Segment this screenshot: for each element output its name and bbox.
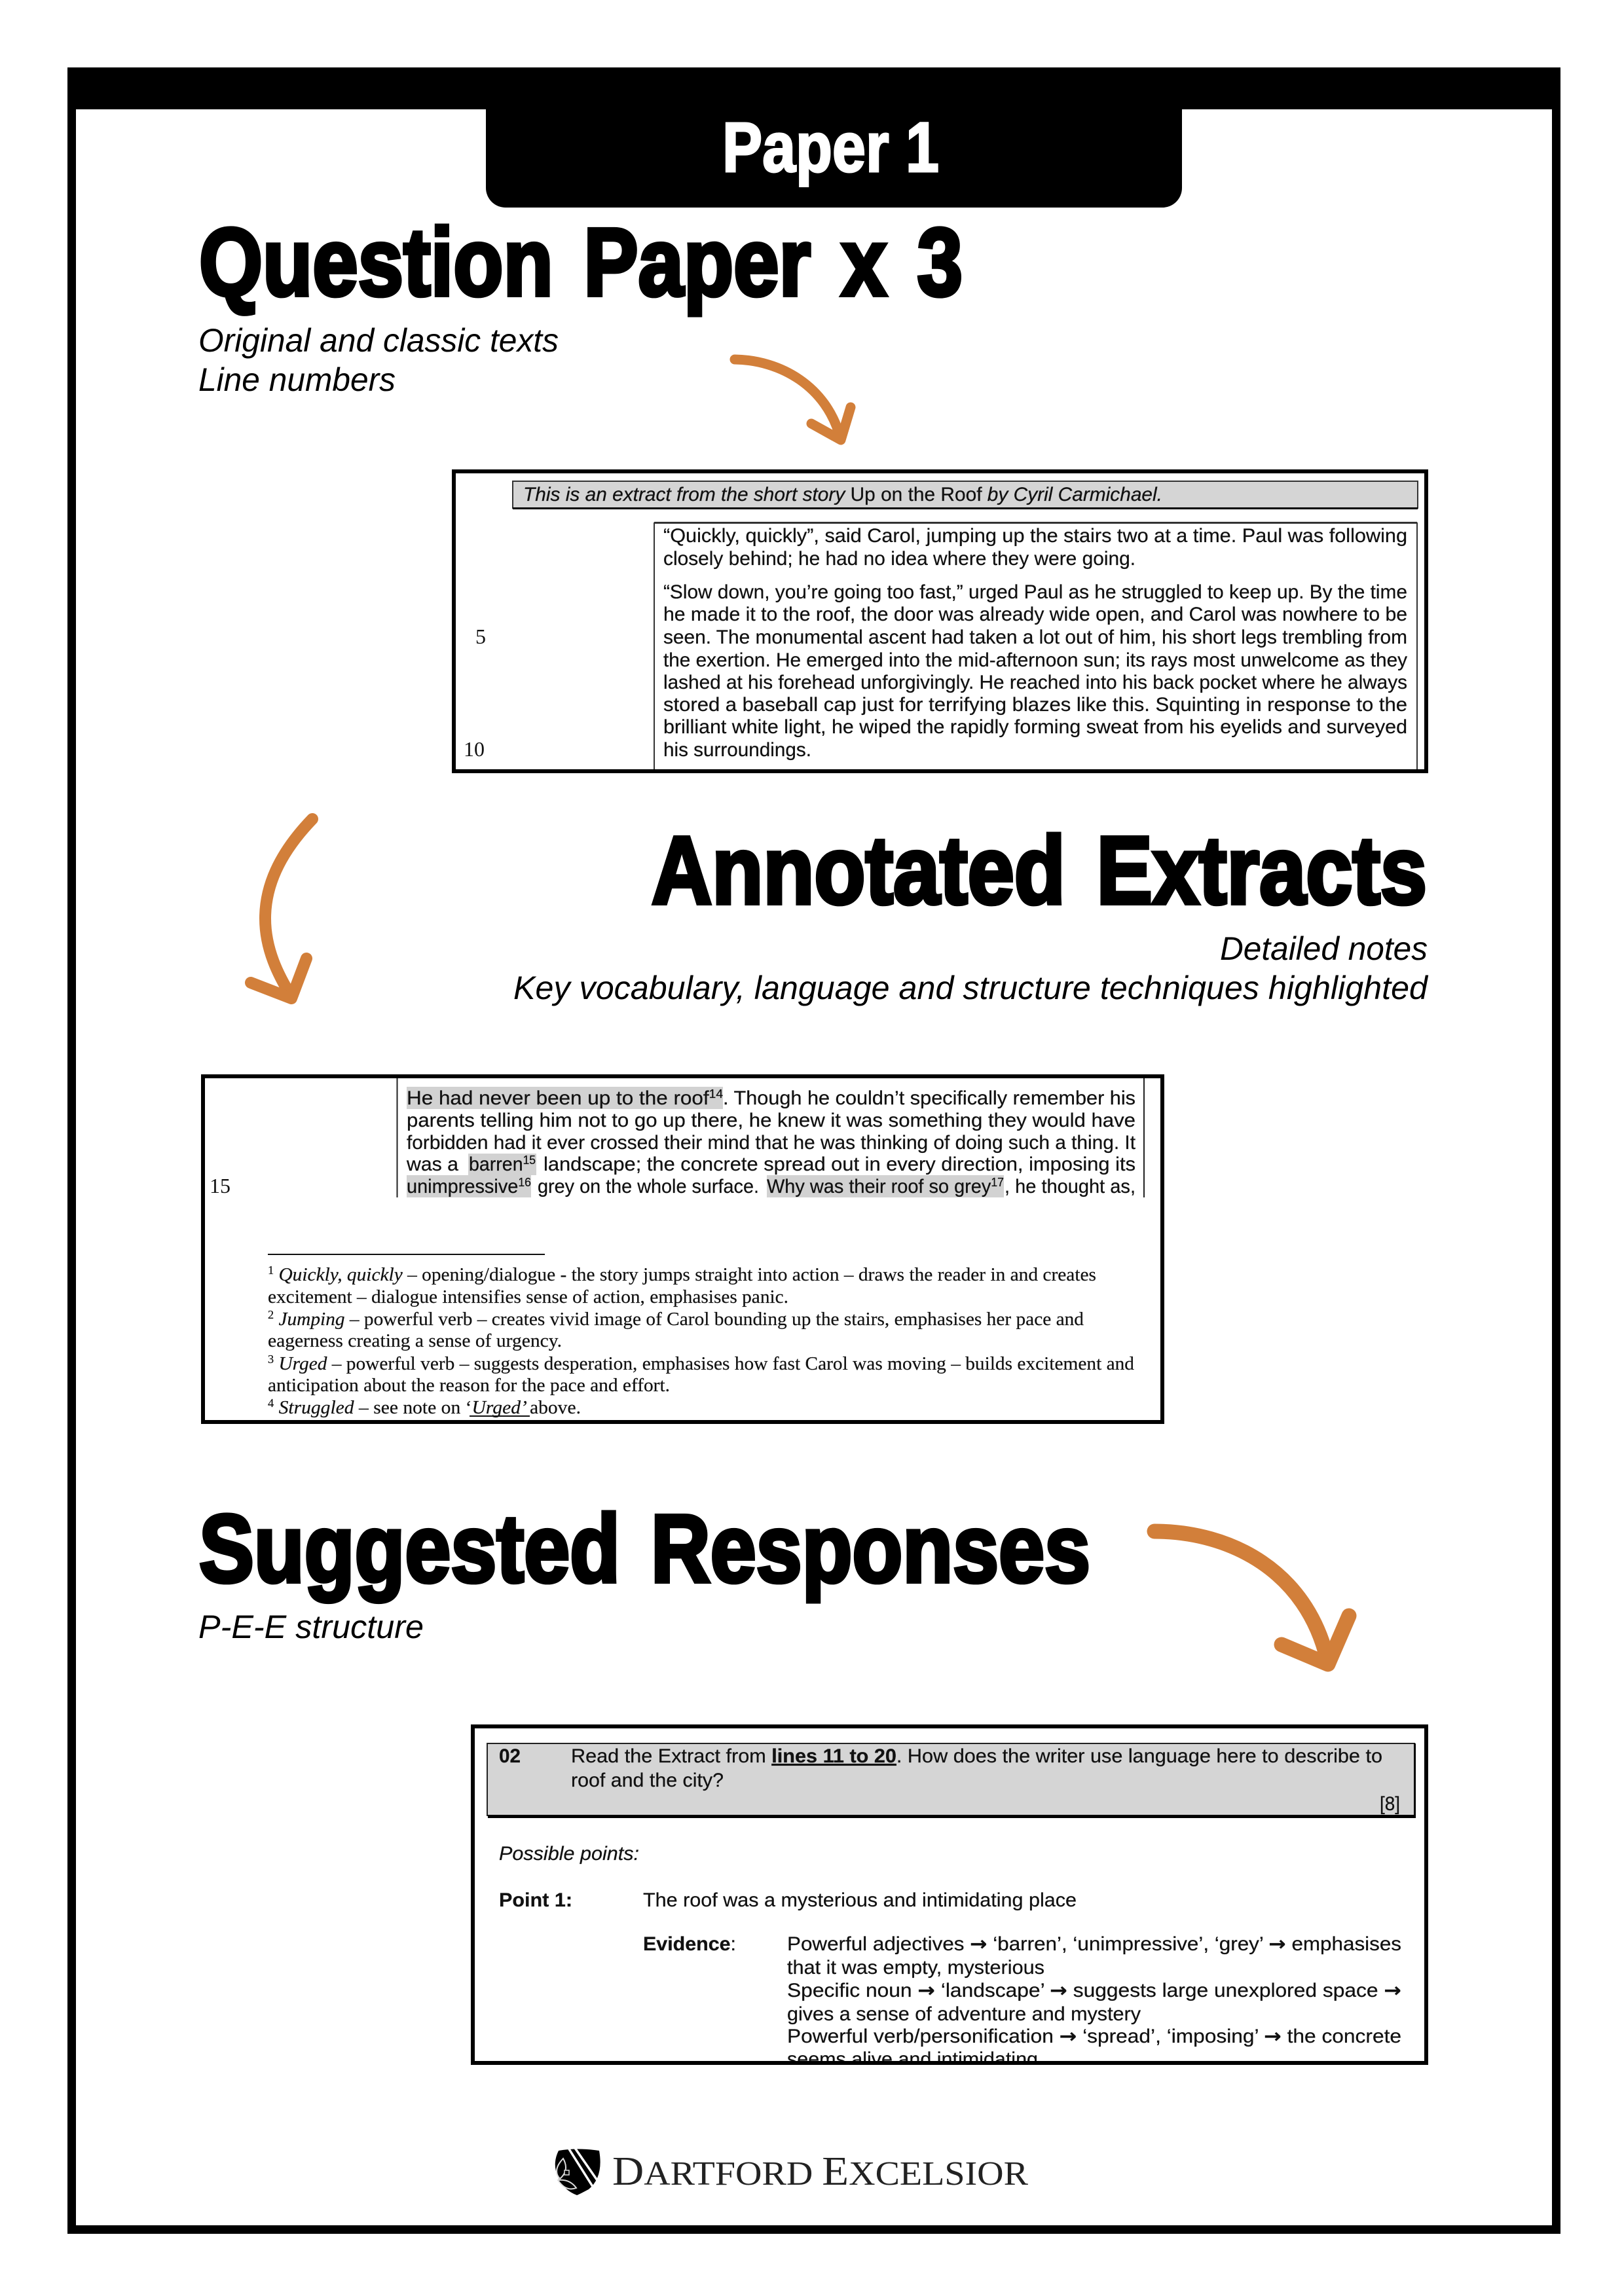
panel: question paper extract bbox=[454, 471, 1426, 771]
question box: 02 bbox=[499, 1745, 521, 1767]
footnotes: Urged bbox=[274, 1353, 327, 1374]
line numbers: 10 bbox=[464, 737, 485, 761]
footnotes: – powerful verb – creates vivid image of Carol bounding up the stairs, emphasises her pace and bbox=[350, 1309, 1075, 1330]
point 1: Point 1: bbox=[499, 1889, 572, 1911]
point 1: The roof was a mysterious and intimidating place bbox=[643, 1889, 1077, 1911]
footnotes bbox=[268, 1254, 1135, 1418]
highlighted extract text: forbidden had it ever crossed their mind that he was thinking of doing such a thing. It bbox=[407, 1132, 1135, 1154]
footnotes: excitement – dialogue intensifies sense of action, emphasises panic. bbox=[268, 1286, 788, 1307]
question box: roof and the city? bbox=[571, 1770, 724, 1791]
text block: annotated extract features bbox=[513, 930, 1429, 1006]
highlighted extract text: 16 bbox=[518, 1176, 531, 1189]
extract body text: brilliant white light, he wiped the rapidly forming sweat from his eyelids and surveyed bbox=[663, 716, 1407, 738]
heading: Annotated Extracts: Annotated Extracts bbox=[652, 817, 1427, 924]
footnotes: – powerful verb – suggests desperation, emphasises how fast Carol was moving – builds excitement and bbox=[332, 1353, 1124, 1374]
heading: Suggested Responses: Suggested Responses bbox=[199, 1495, 1090, 1603]
text block: annotated extract features: Detailed notes bbox=[1220, 930, 1428, 967]
evidence: Powerful verb/personification → ‘spread’, ‘imposing’ → the concrete bbox=[787, 2025, 1401, 2047]
footnotes: anticipation about the reason for the pace and effort. bbox=[268, 1375, 670, 1396]
panel: annotated extract bbox=[203, 1076, 1162, 1422]
line numbers: 5 bbox=[475, 625, 486, 648]
text block: suggested responses feature: P-E-E structure bbox=[198, 1609, 424, 1645]
extract body text: his surroundings. bbox=[663, 739, 811, 761]
highlighted extract text: 17 bbox=[991, 1176, 1004, 1189]
text block: question paper features bbox=[198, 322, 559, 398]
extract body text bbox=[654, 522, 1417, 769]
icon: shield bbox=[555, 2148, 600, 2195]
evidence: Specific noun → ‘landscape’ → suggests large unexplored space → bbox=[787, 1979, 1401, 2001]
highlighted extract text: Why was their roof so grey bbox=[767, 1176, 995, 1197]
extract body text: closely behind; he had no idea where they were going. bbox=[663, 548, 1135, 570]
highlighted extract text: . Though he couldn’t specifically remember his bbox=[723, 1087, 1135, 1109]
line numbers bbox=[464, 625, 486, 761]
extract introduction bar: This is an extract from the short story Up on the Roof by Cyril Carmichael. bbox=[523, 484, 1162, 505]
highlighted extract text: , he thought as, bbox=[1005, 1176, 1135, 1197]
extract body text: he made it to the roof, the door was already wide open, and Carol was nowhere to be bbox=[663, 604, 1407, 625]
extract body text: the exertion. He emerged into the mid-afternoon sun; its rays most unwelcome as they bbox=[663, 649, 1407, 671]
panel: suggested response bbox=[473, 1726, 1426, 2070]
highlighted extract text: He had never been up to the roof bbox=[407, 1087, 690, 1109]
highlighted extract text: parents telling him not to go up there, he knew it was something they would have bbox=[407, 1110, 1135, 1131]
extract body text: “Slow down, you’re going too fast,” urged Paul as he struggled to keep up. By the time bbox=[663, 581, 1407, 603]
highlighted extract text: 14 bbox=[709, 1087, 723, 1101]
arrow: to annotated extract bbox=[251, 819, 312, 998]
extract body text: lashed at his forehead unforgivingly. He reached into his back pocket where he always bbox=[663, 672, 1407, 693]
evidence: Evidence: bbox=[643, 1933, 736, 1955]
possible points: Possible points: bbox=[499, 1843, 639, 1865]
extract body text: “Quickly, quickly”, said Carol, jumping up the stairs two at a time. Paul was following bbox=[663, 525, 1407, 547]
evidence: Powerful adjectives → ‘barren’, ‘unimpressive’, ‘grey’ → emphasises bbox=[787, 1933, 1401, 1955]
arrow: to suggested response bbox=[1154, 1531, 1349, 1664]
footnotes: Jumping bbox=[274, 1309, 345, 1330]
title tab: Paper 1 bbox=[486, 105, 1182, 208]
text block: question paper features: Original and classic texts bbox=[198, 322, 559, 359]
footnotes: eagerness creating a sense of urgency. bbox=[268, 1330, 562, 1351]
highlighted extract text: grey on the whole surface. bbox=[538, 1176, 759, 1197]
heading: Question Paper x 3: Question Paper x 3 bbox=[199, 209, 963, 316]
question box: Read the Extract from lines 11 to 20. How does the writer use language here to describe to bbox=[571, 1745, 1382, 1767]
text block: annotated extract features: Key vocabulary, language and structure techniques highlighted bbox=[513, 970, 1429, 1006]
evidence: seems alive and intimidating bbox=[787, 2049, 1038, 2070]
footnotes: – see note on ‘Urged’ above. bbox=[359, 1397, 580, 1418]
footnotes: 3 bbox=[268, 1353, 274, 1366]
highlighted extract text bbox=[406, 1087, 1135, 1197]
highlighted extract text: landscape; the concrete spread out in every direction, imposing its bbox=[544, 1154, 1135, 1175]
highlighted extract text: 15 bbox=[523, 1154, 536, 1167]
extract body text: stored a baseball cap just for terrifying blazes like this. Squinting in response to the bbox=[663, 694, 1407, 716]
text block: question paper features: Line numbers bbox=[198, 361, 396, 398]
highlighted extract text: unimpressive bbox=[407, 1176, 521, 1197]
evidence: that it was empty, mysterious bbox=[787, 1957, 1044, 1978]
question box: [8] bbox=[1380, 1793, 1400, 1815]
footnotes: Quickly, quickly bbox=[274, 1264, 403, 1285]
extract body text: seen. The monumental ascent had taken a lot out of him, his short legs trembling from bbox=[663, 627, 1407, 648]
evidence bbox=[643, 1933, 1401, 2070]
logo: Dartford Excelsior: DARTFORD EXCELSIOR bbox=[612, 2149, 1028, 2194]
footnotes: Struggled bbox=[274, 1397, 354, 1418]
question box bbox=[487, 1743, 1416, 1818]
arrow: to question paper extract bbox=[735, 359, 851, 440]
extract introduction bar bbox=[513, 481, 1418, 509]
footnotes: 4 bbox=[268, 1396, 274, 1410]
footnotes: 2 bbox=[268, 1308, 274, 1321]
line number: 15 bbox=[210, 1174, 231, 1197]
footnotes: 1 bbox=[268, 1264, 274, 1277]
footnotes: – opening/dialogue - the story jumps straight into action – draws the reader in and creates bbox=[407, 1264, 1087, 1285]
title tab: Paper 1: Paper 1 bbox=[722, 107, 939, 187]
evidence: gives a sense of adventure and mystery bbox=[787, 2003, 1141, 2025]
highlighted extract text: barren bbox=[469, 1154, 525, 1175]
highlighted extract text: was a bbox=[406, 1154, 459, 1175]
